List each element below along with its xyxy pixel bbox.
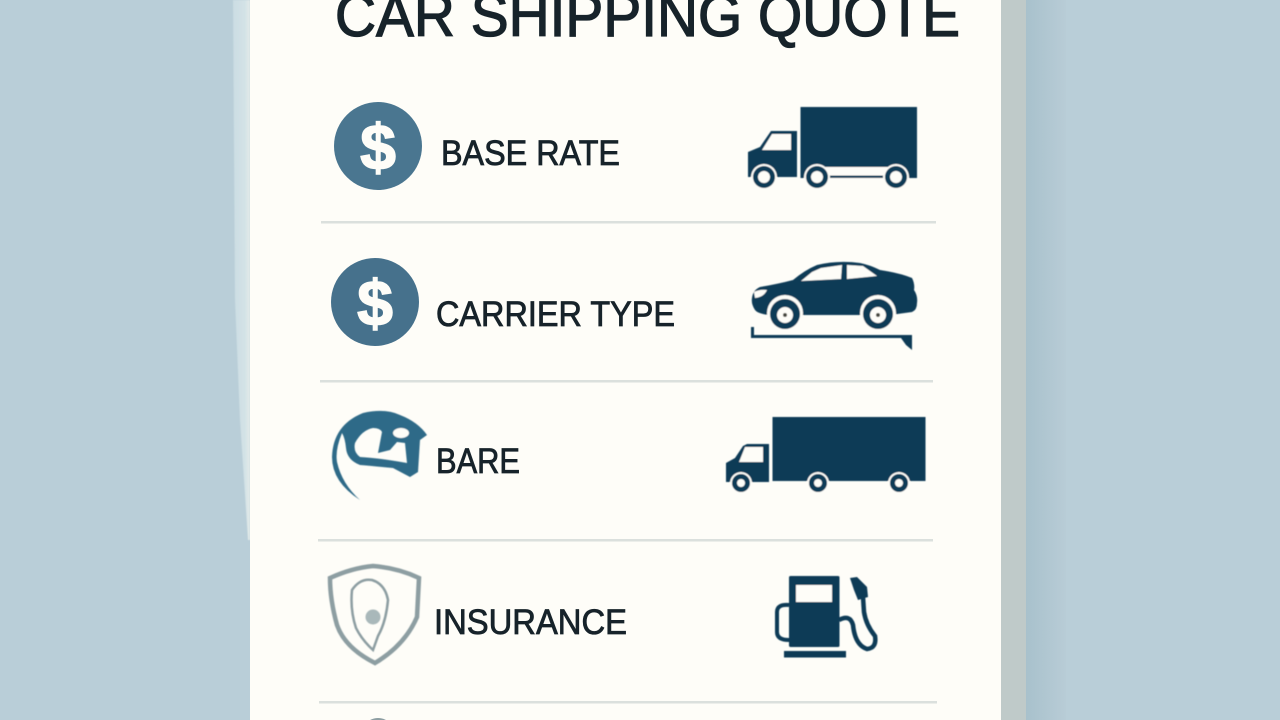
icon: abstract hook — [332, 411, 427, 500]
label: bare: BARE — [436, 442, 520, 481]
label: base rate: BASE RATE — [441, 134, 620, 173]
icon: long truck — [726, 417, 926, 494]
label: insurance: INSURANCE — [434, 603, 627, 642]
row: bare — [332, 411, 926, 500]
row: base rate — [334, 102, 917, 190]
icon: dollar coin — [331, 258, 419, 346]
icon: shield — [330, 566, 419, 663]
icon: dollar coin: $ — [360, 111, 396, 183]
label: carrier type: CARRIER TYPE — [436, 295, 675, 334]
icon: box truck — [748, 107, 917, 190]
panel: quote card — [250, 0, 1001, 720]
icon: fuel pump — [777, 576, 875, 658]
row: carrier type — [331, 258, 917, 350]
icon: dollar coin: $ — [357, 267, 393, 339]
icon: dollar coin — [334, 102, 422, 190]
icon: car on flatbed — [751, 262, 917, 350]
icon: partial next-row icon — [370, 718, 386, 720]
row: insurance — [330, 566, 875, 663]
